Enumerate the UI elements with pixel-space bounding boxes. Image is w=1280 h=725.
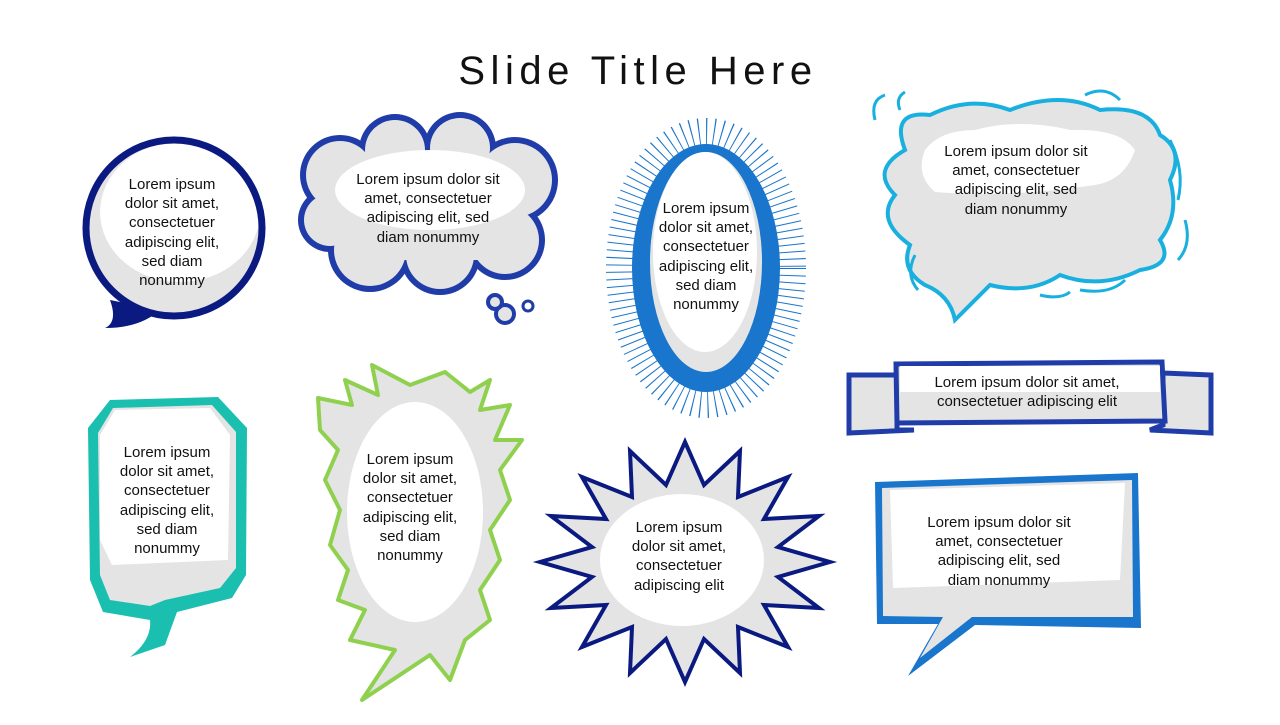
panel: rectangular speech box: amet, consectetuer	[935, 533, 1063, 550]
panel: starburst: consectetuer	[636, 557, 722, 574]
panel: green spiky bubble	[318, 365, 522, 700]
panel: thought cloud: adipiscing elit, sed	[367, 209, 489, 226]
panel: green spiky bubble: nonummy	[377, 547, 443, 564]
panel: wavy cloud: amet, consectetuer	[952, 162, 1080, 179]
panel: rectangular speech box: Lorem ipsum dolor sit	[927, 514, 1072, 531]
title: Slide Title Here	[458, 49, 818, 93]
panel: teal octagon bubble: adipiscing elit,	[120, 502, 214, 519]
panel: round speech bubble: consectetuer	[129, 214, 215, 231]
panel: green spiky bubble: consectetuer	[367, 489, 453, 506]
panel: teal octagon bubble: Lorem ipsum	[124, 444, 210, 461]
panel: starburst: dolor sit amet,	[632, 538, 726, 555]
panel: thought cloud	[298, 112, 558, 323]
panel: spiky oval: adipiscing elit,	[659, 258, 753, 275]
panel: wavy cloud: diam nonummy	[965, 201, 1068, 218]
panel: round speech bubble: dolor sit amet,	[125, 195, 219, 212]
panel: rectangular speech box	[875, 473, 1141, 676]
panel: green spiky bubble: dolor sit amet,	[363, 470, 457, 487]
panel: starburst	[540, 442, 830, 682]
panel: round speech bubble: nonummy	[139, 272, 205, 289]
panel: teal octagon bubble	[88, 397, 247, 657]
panel: teal octagon bubble: consectetuer	[124, 482, 210, 499]
panel: rectangular speech box: diam nonummy	[948, 572, 1051, 589]
panel: starburst: adipiscing elit	[634, 577, 725, 594]
panel: ribbon banner	[849, 362, 1211, 433]
panel: wavy cloud: Lorem ipsum dolor sit	[944, 143, 1089, 160]
panel: teal octagon bubble: dolor sit amet,	[120, 463, 214, 480]
panel: spiky oval: nonummy	[673, 296, 739, 313]
panel: wavy cloud: adipiscing elit, sed	[955, 181, 1077, 198]
panel: teal octagon bubble: sed diam	[137, 521, 197, 538]
panel: starburst: Lorem ipsum	[636, 519, 722, 536]
panel: thought cloud: Lorem ipsum dolor sit	[356, 171, 501, 188]
panel: round speech bubble: sed diam	[142, 253, 202, 270]
panel: spiky oval: dolor sit amet,	[659, 219, 753, 236]
panel: teal octagon bubble: nonummy	[134, 540, 200, 557]
panel: green spiky bubble: Lorem ipsum	[367, 451, 453, 468]
panel: green spiky bubble: sed diam	[380, 528, 440, 545]
panel: thought cloud: amet, consectetuer	[364, 190, 492, 207]
panel: spiky oval: sed diam	[676, 277, 736, 294]
panel: wavy cloud	[874, 91, 1187, 320]
panel: spiky oval: Lorem ipsum	[663, 200, 749, 217]
panel: thought cloud: diam nonummy	[377, 229, 480, 246]
panel: spiky oval	[624, 136, 788, 400]
panel: ribbon banner: consectetuer adipiscing elit	[937, 393, 1118, 410]
panel: green spiky bubble: adipiscing elit,	[363, 509, 457, 526]
panel: round speech bubble	[86, 140, 262, 328]
panel: spiky oval: consectetuer	[663, 238, 749, 255]
panel: round speech bubble: adipiscing elit,	[125, 234, 219, 251]
panel: rectangular speech box: adipiscing elit, sed	[938, 552, 1060, 569]
panel: round speech bubble: Lorem ipsum	[129, 176, 215, 193]
panel: ribbon banner: Lorem ipsum dolor sit amet,	[934, 374, 1120, 391]
